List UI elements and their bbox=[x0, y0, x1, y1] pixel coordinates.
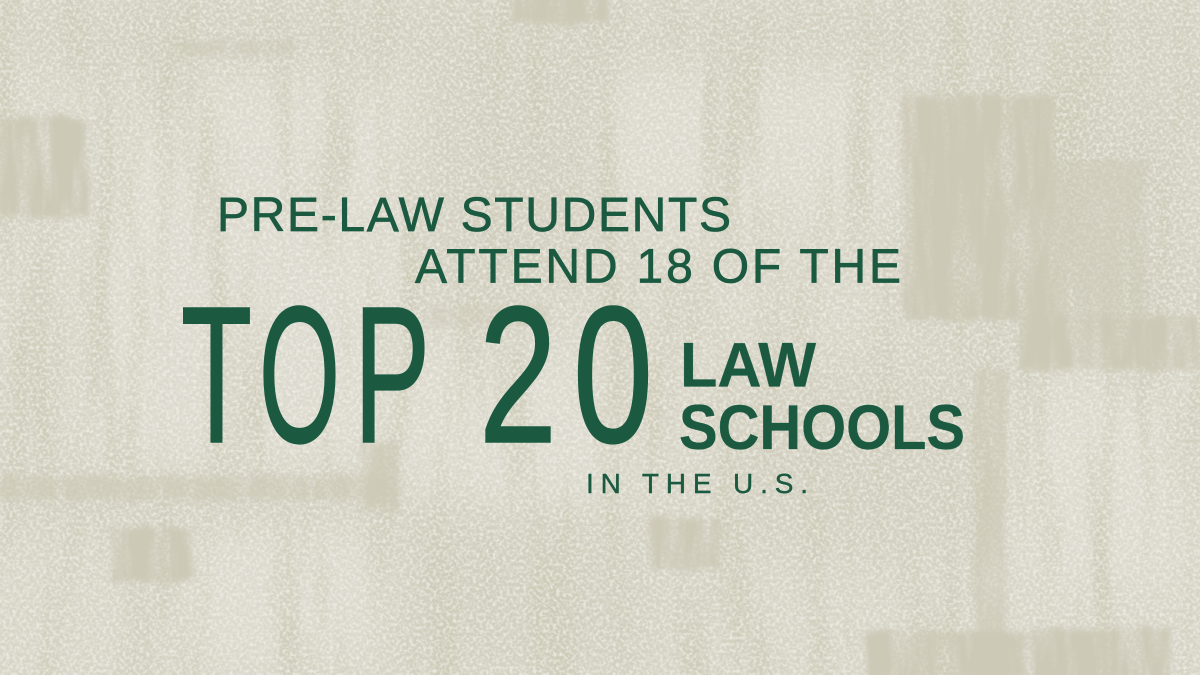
caption: in the u.s.: IN THE U.S. bbox=[586, 468, 808, 499]
headline: top 20: 2 bbox=[479, 267, 557, 484]
headline: top 20: P bbox=[354, 267, 430, 484]
label: law schools bbox=[679, 331, 965, 463]
heading: pre-law students: PRE-LAW STUDENTS bbox=[217, 189, 731, 242]
headline: top 20: 0 bbox=[573, 267, 653, 484]
label: law schools: SCHOOLS bbox=[679, 393, 965, 463]
headline: top 20: O bbox=[259, 267, 340, 484]
heading: attend 18 of the: ATTEND 18 OF THE bbox=[415, 240, 901, 294]
label: law schools: LAW bbox=[680, 331, 817, 401]
headline: top 20: T bbox=[181, 267, 252, 484]
headline: top 20 bbox=[181, 267, 653, 484]
